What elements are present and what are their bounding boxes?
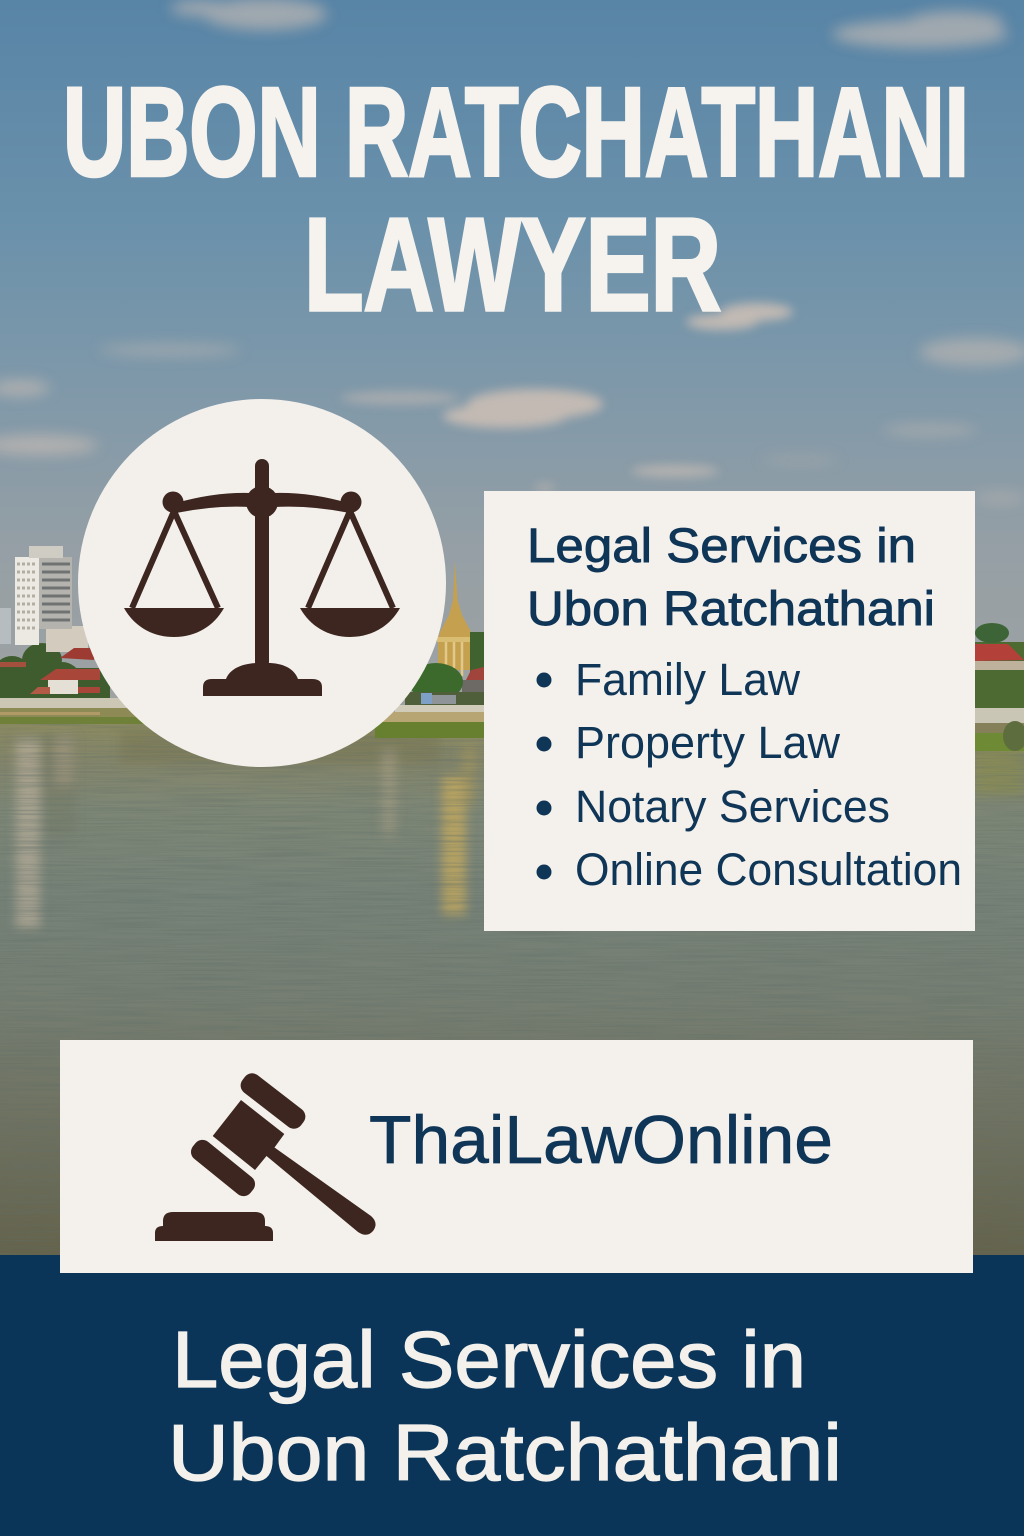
service list: Family Law	[575, 654, 800, 705]
footer heading: Legal Services in	[172, 1315, 806, 1404]
icon: gavel	[155, 1070, 376, 1241]
brand name: ThaiLawOnline	[369, 1102, 833, 1178]
service list: Online Consultation	[575, 844, 962, 895]
panel: ThaiLawOnline brand	[60, 1040, 973, 1273]
tower building	[15, 546, 72, 645]
footer heading	[168, 1315, 842, 1497]
service list: Notary Services	[575, 781, 890, 832]
brand background	[60, 1040, 973, 1273]
red roof houses	[60, 648, 94, 660]
sky	[0, 0, 1024, 730]
clouds	[0, 0, 1024, 504]
far bank left side	[0, 546, 150, 724]
far bank right side	[975, 623, 1024, 751]
water reflections	[16, 730, 1024, 928]
panel heading: Ubon Ratchathani	[527, 583, 935, 636]
service list: Property Law	[575, 717, 840, 768]
title: LAWYER	[304, 191, 721, 338]
footer heading: Ubon Ratchathani	[168, 1408, 842, 1497]
panel heading: Legal Services in	[527, 520, 916, 573]
panel: legal services list	[484, 491, 975, 931]
water	[0, 722, 1024, 1262]
circular badge with scales of justice	[78, 399, 446, 767]
icon: scales of justice	[124, 459, 400, 696]
footer band	[0, 1255, 1024, 1536]
water ripples	[0, 724, 1024, 1255]
title	[63, 62, 969, 338]
service list	[536, 654, 962, 895]
panel heading	[527, 520, 935, 636]
panel background	[484, 491, 975, 931]
temple bank	[375, 561, 484, 738]
badge circle	[78, 399, 446, 767]
golden stupa	[437, 561, 474, 676]
